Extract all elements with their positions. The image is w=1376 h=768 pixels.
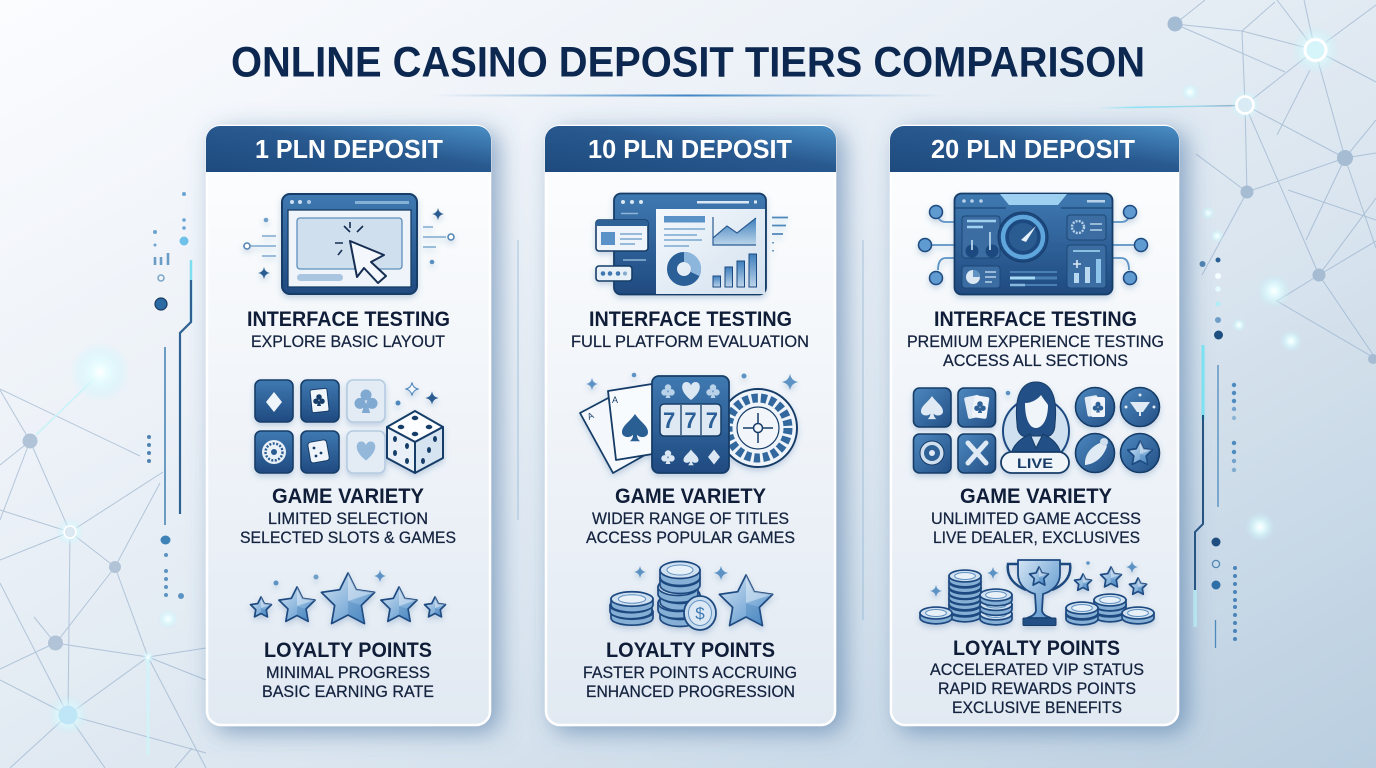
text: game variety: LIMITED SELECTION [268,509,428,528]
panel: 1 PLN deposit [206,126,491,725]
text: loyalty points: LOYALTY POINTS [606,639,775,662]
text: game variety: UNLIMITED GAME ACCESS [931,509,1141,528]
text: loyalty points [930,637,1144,717]
circuit decoration: left [147,192,191,599]
text: game variety [240,485,456,547]
icon: game tiles and dice [255,380,443,473]
icon: premium control panel [918,194,1148,294]
icon: live dealer and game tiles [914,382,1160,473]
text: interface testing: INTERFACE TESTING [934,308,1137,331]
text: interface testing [247,308,450,351]
text: loyalty points: ACCELERATED VIP STATUS [930,660,1144,679]
network decoration: top right [1098,0,1376,364]
icon: cards, slot machine and roulette: 777 [663,408,718,433]
network decoration: bottom left [0,342,206,768]
text: loyalty points: FASTER POINTS ACCRUING [583,663,797,682]
text: interface testing: EXPLORE BASIC LAYOUT [251,332,445,351]
text: game variety: GAME VARIETY [960,485,1112,508]
panel: 10 PLN deposit [545,126,836,725]
icon: coins and star [610,562,773,630]
text: interface testing: INTERFACE TESTING [589,308,792,331]
text: interface testing: ACCESS ALL SECTIONS [943,351,1128,370]
text: interface testing: FULL PLATFORM EVALUATION [571,332,809,351]
text: interface testing: INTERFACE TESTING [247,308,450,331]
text: game variety [931,485,1141,547]
card header: 1 PLN DEPOSIT [255,134,443,164]
panel: 20 PLN deposit [890,126,1179,725]
icon: trophy, coins and stars [920,560,1154,626]
card background [207,126,490,725]
icon: cards, slot machine and roulette: A [612,395,618,405]
icon: cards, slot machine and roulette [580,373,798,473]
card header: 20 PLN DEPOSIT [931,134,1135,164]
text: loyalty points: EXCLUSIVE BENEFITS [952,698,1122,717]
icon: five stars [251,570,445,624]
icon: live dealer and game tiles: LIVE [1017,455,1053,471]
icon: coins and star: $ [695,604,705,623]
text: interface testing [907,308,1164,370]
text: game variety: LIVE DEALER, EXCLUSIVES [933,528,1140,547]
text: loyalty points: ENHANCED PROGRESSION [586,682,795,701]
icon: browser with cursor [243,194,454,294]
text: interface testing: PREMIUM EXPERIENCE TESTING [907,332,1164,351]
text: game variety: GAME VARIETY [615,485,766,508]
icon: cards, slot machine and roulette: A [586,410,595,422]
icon: analytics dashboard [596,194,788,294]
text: loyalty points: BASIC EARNING RATE [262,682,434,701]
card header [206,126,491,172]
text: loyalty points: RAPID REWARDS POINTS [938,679,1136,698]
text: loyalty points: LOYALTY POINTS [264,639,432,662]
text: game variety: WIDER RANGE OF TITLES [592,509,789,528]
text: loyalty points: LOYALTY POINTS [953,637,1120,660]
card background [546,126,835,725]
text: game variety: GAME VARIETY [272,485,424,508]
circuit decoration: right [1195,258,1275,648]
title underline [430,94,946,96]
text: loyalty points: MINIMAL PROGRESS [266,663,430,682]
text: interface testing [571,308,809,351]
card header [545,126,836,172]
text: game variety: SELECTED SLOTS & GAMES [240,528,456,547]
text: game variety [586,485,795,547]
card header [890,126,1179,172]
text: loyalty points [583,639,797,701]
title: ONLINE CASINO DEPOSIT TIERS COMPARISON [231,38,1145,86]
card header: 10 PLN DEPOSIT [588,134,792,164]
card background [891,126,1178,725]
text: game variety: ACCESS POPULAR GAMES [586,528,795,547]
column separators [518,240,863,620]
text: loyalty points [262,639,434,701]
